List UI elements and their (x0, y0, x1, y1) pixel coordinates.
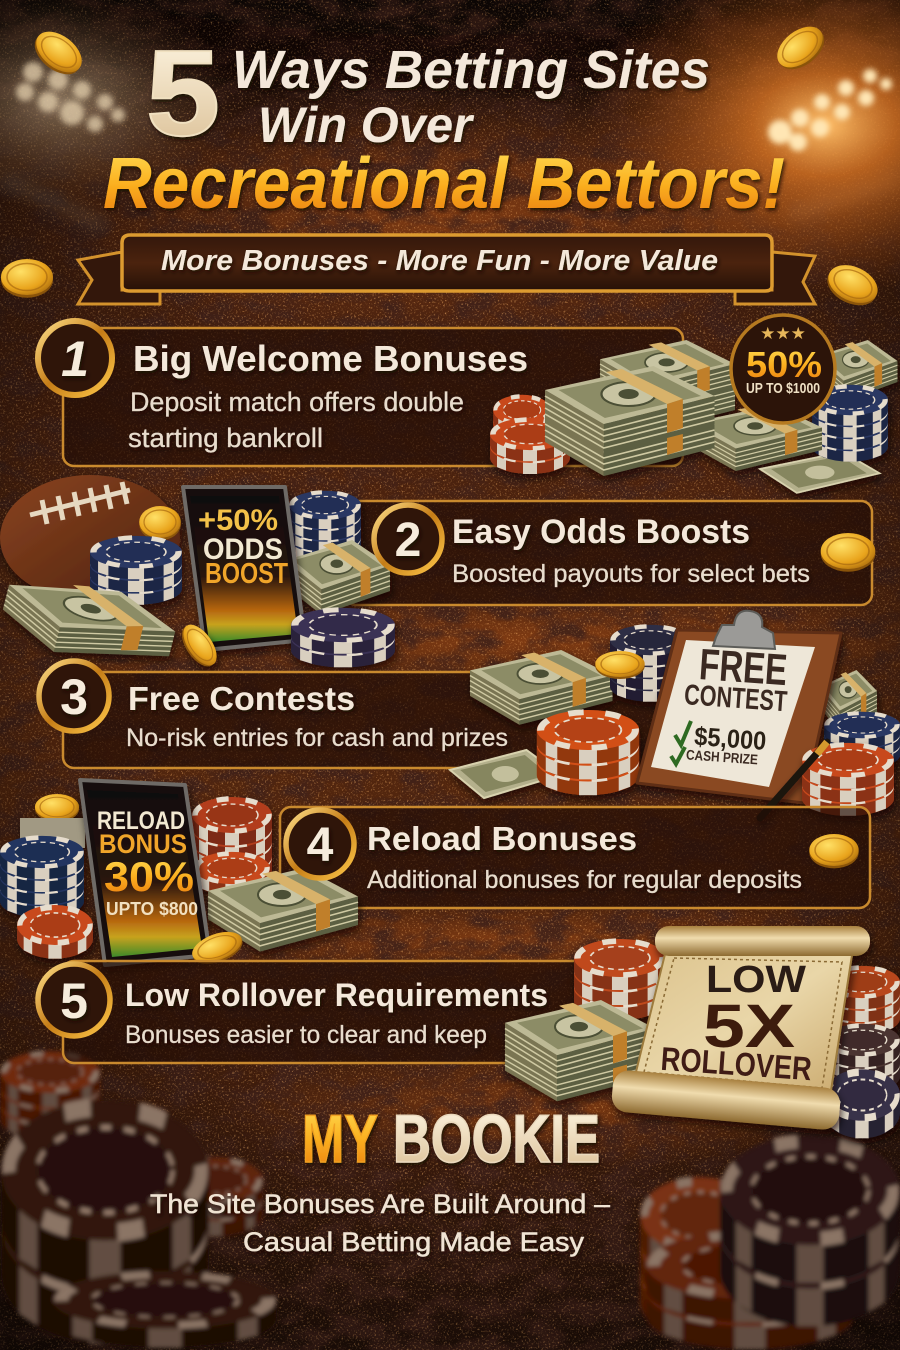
clipboard: free contest: CONTEST (683, 679, 788, 718)
panel 1 description: starting bankroll (128, 423, 323, 453)
badge number 1 (38, 321, 112, 395)
chips and pen (760, 742, 894, 818)
panel 1 heading: Big Welcome Bonuses (133, 338, 528, 379)
scroll: low 5x rollover: ROLLOVER (660, 1040, 813, 1087)
panel 5 description: Bonuses easier to clear and keep (125, 1021, 487, 1049)
title line 2: Win Over (258, 97, 474, 153)
phone: reload bonus: 30% (104, 853, 194, 900)
panel 3: free contests (39, 611, 900, 818)
badge number 3: 3 (60, 669, 88, 725)
chips and coin at phone base (175, 608, 395, 672)
panel 5 heading: Low Rollover Requirements (125, 977, 548, 1013)
illustration: cash and chips (450, 625, 900, 798)
badge number 3 (39, 661, 109, 731)
title numeral 5: 5 (146, 25, 220, 161)
panel 1 description: Deposit match offers double (130, 387, 464, 417)
badge number 5: 5 (60, 973, 88, 1029)
footer tagline: Casual Betting Made Easy (243, 1227, 585, 1257)
badge number 1: 1 (61, 331, 89, 387)
bonus badge (731, 315, 835, 423)
bonus badge: UP TO $1000 (746, 380, 820, 397)
panel 1 description (128, 387, 464, 453)
panel 4 description: Additional bonuses for regular deposits (367, 866, 802, 894)
panel 3 heading: Free Contests (128, 680, 355, 717)
badge number 4 (286, 810, 354, 878)
phone: reload bonus (80, 780, 210, 965)
coin at phone base (188, 926, 247, 970)
scroll: low 5x rollover: LOW (706, 959, 806, 1001)
title line 1: Ways Betting Sites (232, 40, 710, 100)
tagline ribbon (78, 235, 815, 304)
panel 2 description: Boosted payouts for select bets (452, 560, 810, 588)
scroll: low 5x rollover: 5X (703, 992, 795, 1060)
panel 1: big welcome bonuses (38, 315, 898, 493)
clipboard: free contest (637, 611, 841, 803)
coin (809, 834, 859, 868)
phone: reload bonus: UPTO $800 (106, 899, 198, 919)
phone: reload bonus: BONUS (99, 829, 187, 859)
phone: reload bonus: RELOAD (97, 807, 185, 835)
tagline text: More Bonuses - More Fun - More Value (161, 245, 718, 277)
clipboard: free contest: FREE (698, 640, 789, 695)
badge number 5 (38, 964, 110, 1036)
illustration: football, phone, chips, cash (0, 475, 390, 679)
top coins (1, 18, 884, 313)
panel 4 heading: Reload Bonuses (367, 820, 637, 857)
panel 5: low rollover requirements (38, 926, 900, 1138)
phone: odds boost (183, 487, 305, 650)
bonus badge: 50% (746, 344, 822, 385)
brand logo: my bookie: BOOKIE (393, 1101, 600, 1177)
footer tagline: The Site Bonuses Are Built Around – (150, 1189, 610, 1219)
illustration: chips and cash (0, 794, 358, 959)
brand logo: my bookie (302, 1101, 600, 1177)
illustration: chips and cash (505, 939, 900, 1138)
phone: odds boost: +50% (198, 504, 278, 537)
panel 2 heading: Easy Odds Boosts (452, 513, 750, 551)
phone: odds boost: BOOST (205, 558, 288, 590)
scroll: low 5x rollover (611, 926, 870, 1131)
clipboard: free contest: CASH PRIZE (686, 746, 758, 767)
panel 2: easy odds boosts (0, 475, 875, 679)
footer tagline (150, 1189, 610, 1257)
badge number 4: 4 (307, 819, 334, 872)
blurred foreground chips (0, 1051, 900, 1350)
badge number 2: 2 (395, 514, 421, 567)
badge number 2 (374, 505, 442, 573)
panel 4: reload bonuses (0, 780, 870, 970)
bonus badge: ★★★ (760, 324, 806, 343)
phone: odds boost: ODDS (203, 533, 283, 566)
title line 3 highlight: Recreational Bettors! (103, 144, 785, 224)
title (103, 25, 785, 224)
coin (821, 533, 875, 572)
clipboard: free contest: $5,000 (693, 721, 767, 756)
illustration: cash and chips with bonus badge (490, 340, 898, 493)
brand logo: my bookie: MY (302, 1101, 378, 1177)
panel 3 description: No-risk entries for cash and prizes (126, 724, 508, 752)
